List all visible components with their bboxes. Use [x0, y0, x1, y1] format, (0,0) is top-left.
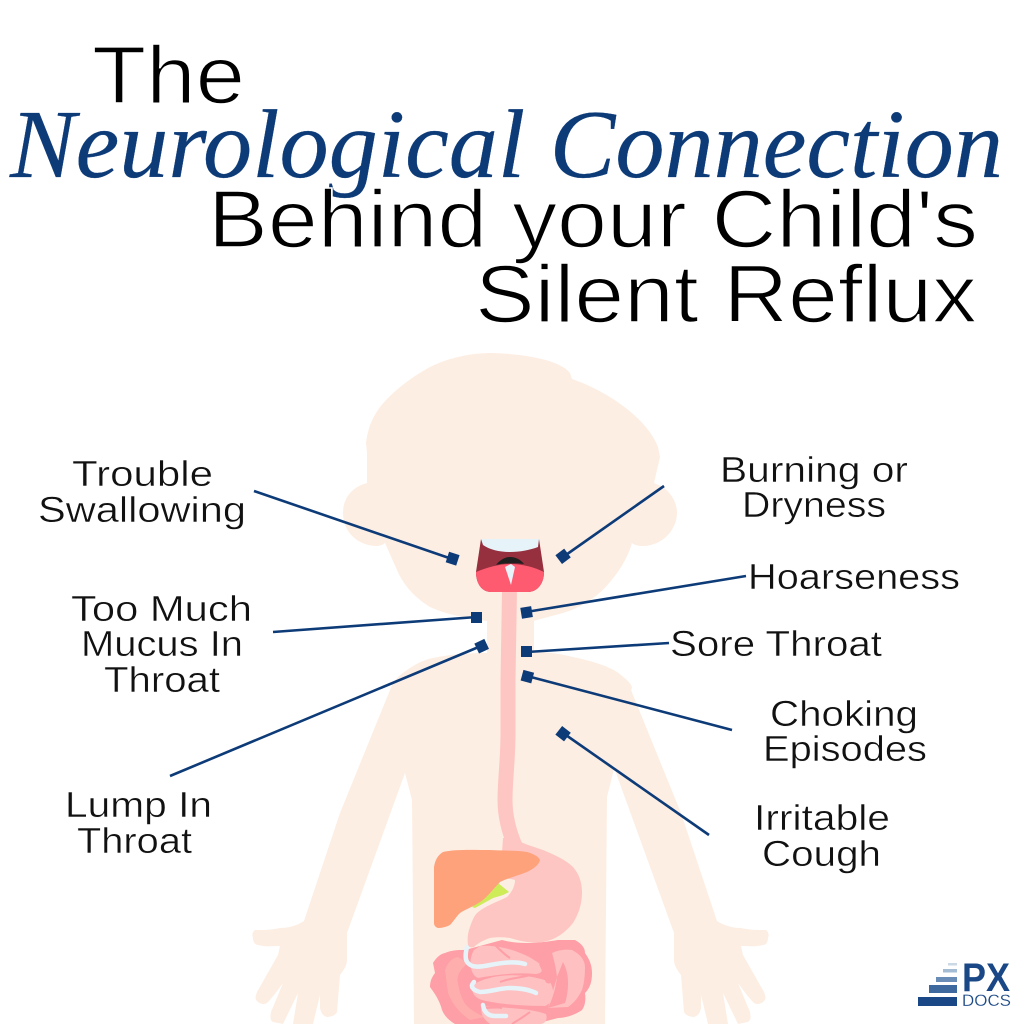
title [9, 30, 1003, 340]
pointer: trouble swallowing [254, 491, 460, 566]
title: Silent Reflux [475, 249, 977, 340]
intestine lighter left folds [445, 957, 485, 1020]
label: trouble swallowing: Trouble [72, 453, 213, 494]
pointer: sore throat [521, 643, 669, 657]
label: choking episodes: Episodes [763, 728, 927, 769]
intestine base [430, 940, 592, 1024]
label: burning or dryness: Burning or [720, 449, 908, 490]
throat opening [496, 557, 524, 565]
pointer: burning or dryness [555, 486, 664, 564]
mouth and throat [476, 539, 544, 592]
pointer: lump in throat [170, 639, 489, 776]
title: Behind your Child's [208, 174, 978, 265]
label: burning or dryness [720, 449, 908, 525]
label: hoarseness: Hoarseness [748, 556, 960, 597]
label: choking episodes: Choking [770, 693, 918, 734]
label: lump in throat: Lump In [65, 784, 212, 825]
label: irritable cough: Cough [762, 833, 881, 874]
esophagus [505, 590, 516, 848]
pointer lines and markers [170, 486, 746, 835]
left arm and hand [252, 690, 420, 1024]
label: too much mucus in throat: Throat [104, 659, 220, 700]
gallbladder [472, 883, 509, 908]
pointer: irritable cough [555, 726, 709, 835]
label: too much mucus in throat [71, 588, 252, 700]
logo wordmark: PX [962, 956, 1010, 1000]
liver [434, 850, 540, 928]
label: lump in throat: Throat [77, 820, 192, 861]
label: sore throat: Sore Throat [670, 623, 882, 664]
tongue [476, 564, 544, 592]
pointer: too much mucus [273, 612, 482, 632]
torso and neck [390, 610, 632, 1024]
child body illustration [252, 353, 769, 1024]
title: Neurological Connection [9, 91, 1003, 198]
logo: PX Docs [918, 956, 1011, 1010]
label: trouble swallowing [38, 453, 246, 530]
logo stair bars [918, 963, 957, 1006]
inner mouth [476, 539, 544, 592]
label: too much mucus in throat: Mucus In [81, 623, 243, 664]
title: The [92, 30, 245, 121]
uvula [505, 564, 515, 585]
body silhouette [252, 353, 769, 1024]
upper palate [481, 539, 539, 552]
pointer: hoarseness [520, 576, 746, 619]
label: choking episodes [763, 693, 927, 769]
logo: PX Docs: DOCS [962, 992, 1011, 1010]
right arm and hand [601, 690, 769, 1024]
small and large intestine [430, 940, 592, 1024]
intestine fold lines [478, 945, 550, 1024]
intestine pale loops [471, 946, 585, 1024]
label: irritable cough: Irritable [754, 797, 890, 838]
head [343, 353, 677, 621]
intestine white tubes [466, 947, 536, 1016]
label: burning or dryness: Dryness [742, 484, 886, 525]
stomach [468, 838, 582, 947]
label: trouble swallowing: Swallowing [38, 489, 246, 530]
label: lump in throat [65, 784, 212, 861]
label: too much mucus in throat: Too Much [71, 588, 252, 629]
pointer: choking episodes [521, 670, 732, 730]
intestine dark wedge [548, 962, 568, 1008]
label: irritable cough [754, 797, 890, 874]
